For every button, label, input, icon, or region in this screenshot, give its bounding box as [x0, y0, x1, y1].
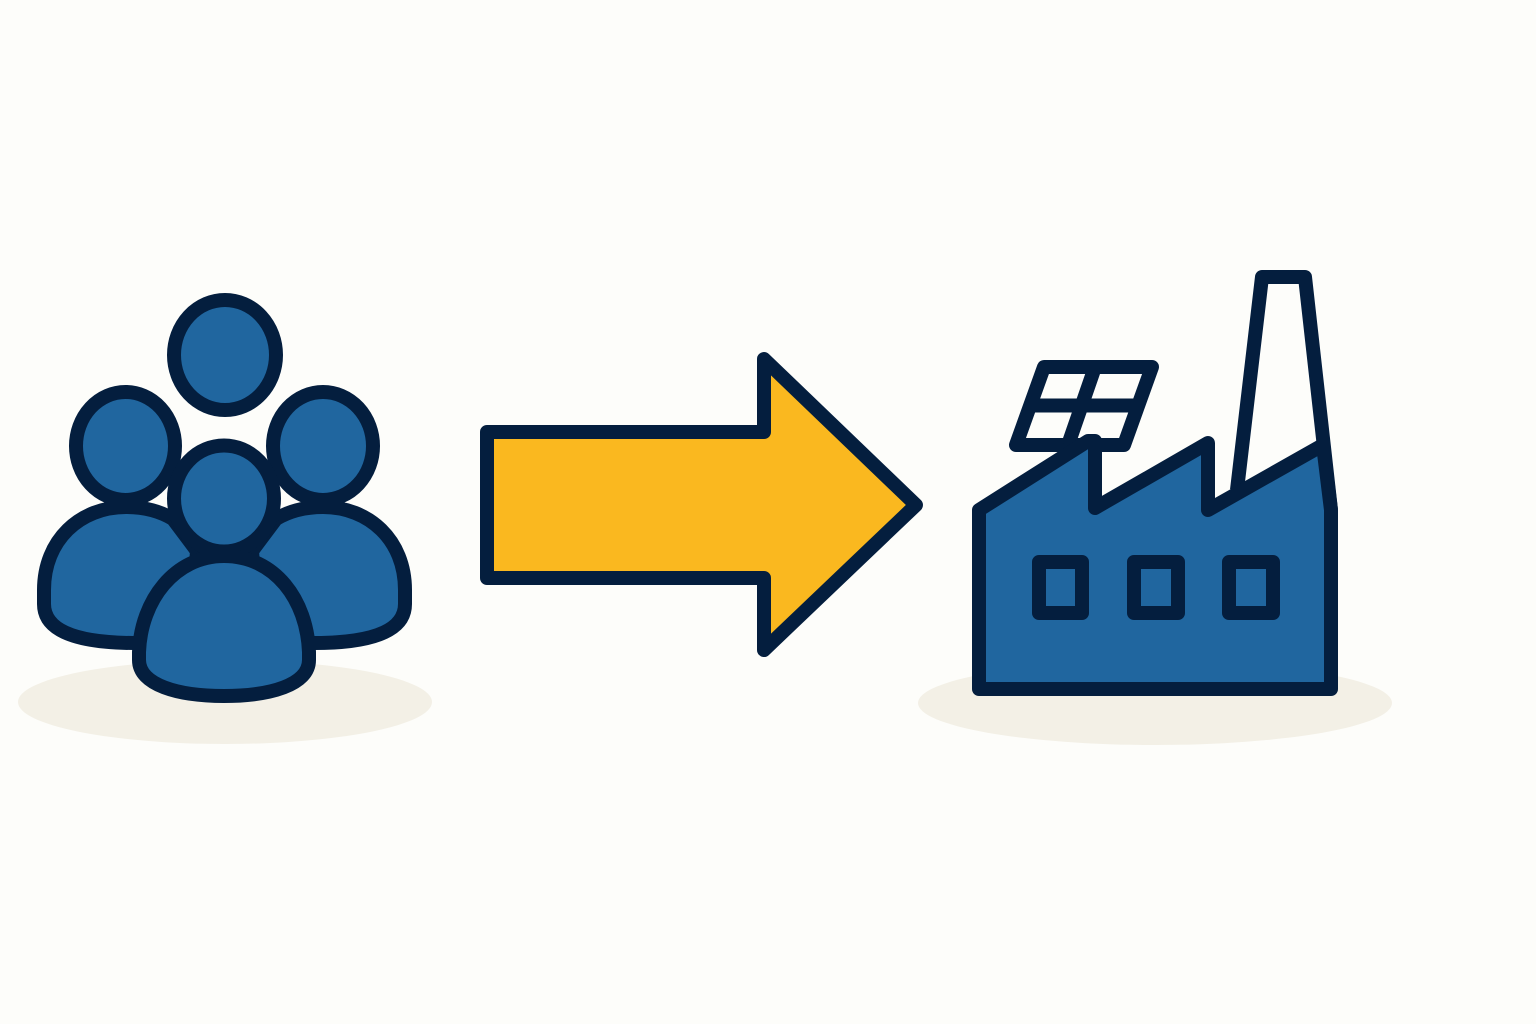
window 2	[1134, 562, 1178, 613]
solar panel	[1016, 367, 1152, 445]
ground shadow: people	[18, 660, 432, 744]
window 3	[1229, 562, 1273, 613]
person: back top	[174, 300, 276, 410]
icon: factory	[979, 277, 1331, 689]
person: front	[139, 446, 309, 696]
person: left	[44, 392, 197, 643]
person: right	[252, 392, 405, 643]
icon: group of people	[44, 300, 405, 696]
window 1	[1039, 562, 1082, 613]
factory building	[979, 441, 1331, 689]
person: front neck	[170, 520, 279, 555]
arrow: yellow right arrow	[487, 359, 916, 650]
chimney	[1237, 277, 1331, 510]
ground shadow: factory	[918, 661, 1392, 745]
